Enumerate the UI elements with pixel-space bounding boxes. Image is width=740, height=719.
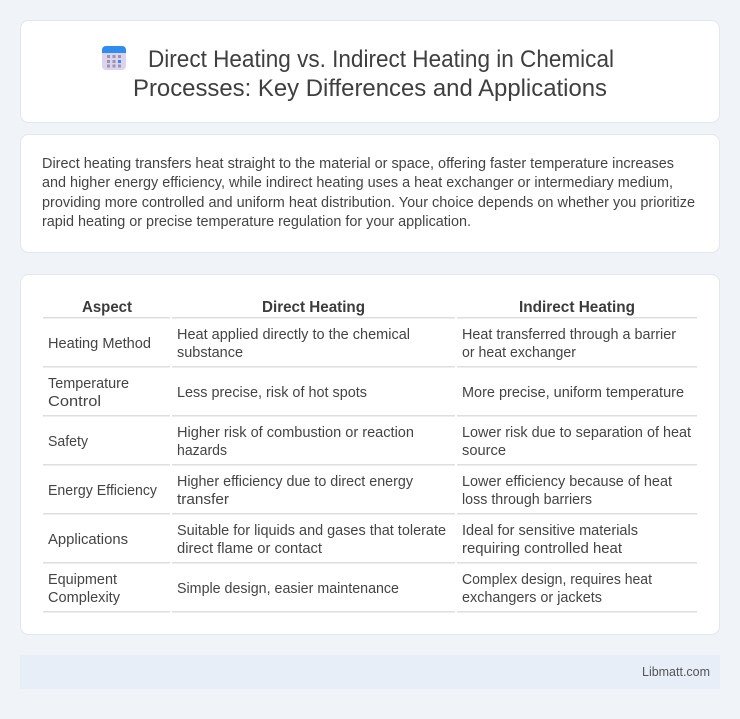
row: equipment complexity: [48, 572, 652, 606]
text block: summary: rapid heating or precise temperature regulation for your application.: [42, 214, 471, 230]
row: heating method: Heating Method: [48, 336, 151, 352]
row: applications: Ideal for sensitive materials: [462, 523, 638, 539]
table header row: Aspect: [82, 299, 132, 316]
table header row: Indirect Heating: [519, 299, 635, 316]
row: equipment complexity: Equipment: [48, 572, 117, 588]
row: energy efficiency: Energy Efficiency: [48, 483, 158, 499]
row: heating method: [48, 327, 676, 361]
row: applications: Applications: [48, 532, 128, 548]
row: temperature control: [48, 376, 684, 410]
table header row: Direct Heating: [262, 299, 365, 316]
row: temperature control: Control: [48, 394, 101, 410]
row: applications: [48, 523, 638, 557]
row: heating method: or heat exchanger: [462, 345, 576, 361]
row: temperature control: More precise, uniform temperature: [462, 385, 684, 401]
row: applications: direct flame or contact: [177, 541, 322, 557]
footer: Libmatt.com: [642, 664, 710, 679]
title: Direct Heating vs. Indirect Heating in Chemical: [148, 46, 614, 73]
panel: comparison table: [20, 274, 720, 634]
row: safety: source: [462, 443, 506, 459]
row: applications: requiring controlled heat: [462, 541, 622, 557]
row: safety: Safety: [48, 434, 89, 450]
row: equipment complexity: Complexity: [48, 590, 121, 606]
panel: title card: [20, 20, 720, 122]
row: temperature control: Less precise, risk of hot spots: [177, 385, 367, 401]
row: applications: Suitable for liquids and gases that tolerate: [177, 523, 446, 539]
text block: summary: [42, 156, 695, 230]
row: safety: Lower risk due to separation of heat: [462, 425, 691, 441]
row: equipment complexity: exchangers or jackets: [462, 590, 602, 606]
row: heating method: substance: [177, 345, 243, 361]
row: energy efficiency: transfer: [177, 492, 229, 508]
row: safety: [48, 425, 691, 459]
text block: summary: providing more controlled and uniform heat distribution. Your choice depends on whether you prioritize: [42, 195, 695, 211]
row: energy efficiency: [48, 474, 672, 508]
icon: calendar: [102, 46, 126, 70]
text block: summary: and higher energy efficiency, while indirect heating uses a heat exchanger or intermediary medium,: [42, 175, 673, 191]
row: heating method: Heat applied directly to the chemical: [177, 327, 410, 343]
table header row: [82, 299, 635, 316]
title: [133, 46, 614, 102]
footer: [20, 655, 720, 689]
row: safety: Higher risk of combustion or reaction: [177, 425, 414, 441]
row: heating method: Heat transferred through a barrier: [462, 327, 676, 343]
row: equipment complexity: Simple design, easier maintenance: [177, 581, 399, 597]
row: safety: hazards: [177, 443, 227, 459]
text block: summary: Direct heating transfers heat straight to the material or space, offering faster temperature increases: [42, 156, 674, 172]
panel: summary paragraph: [20, 134, 720, 252]
row: energy efficiency: Higher efficiency due to direct energy: [177, 474, 414, 490]
title: Processes: Key Differences and Applications: [133, 75, 607, 102]
row: temperature control: Temperature: [48, 376, 129, 392]
row: equipment complexity: Complex design, requires heat: [462, 572, 652, 588]
row: energy efficiency: loss through barriers: [462, 492, 592, 508]
row: energy efficiency: Lower efficiency because of heat: [462, 474, 672, 490]
